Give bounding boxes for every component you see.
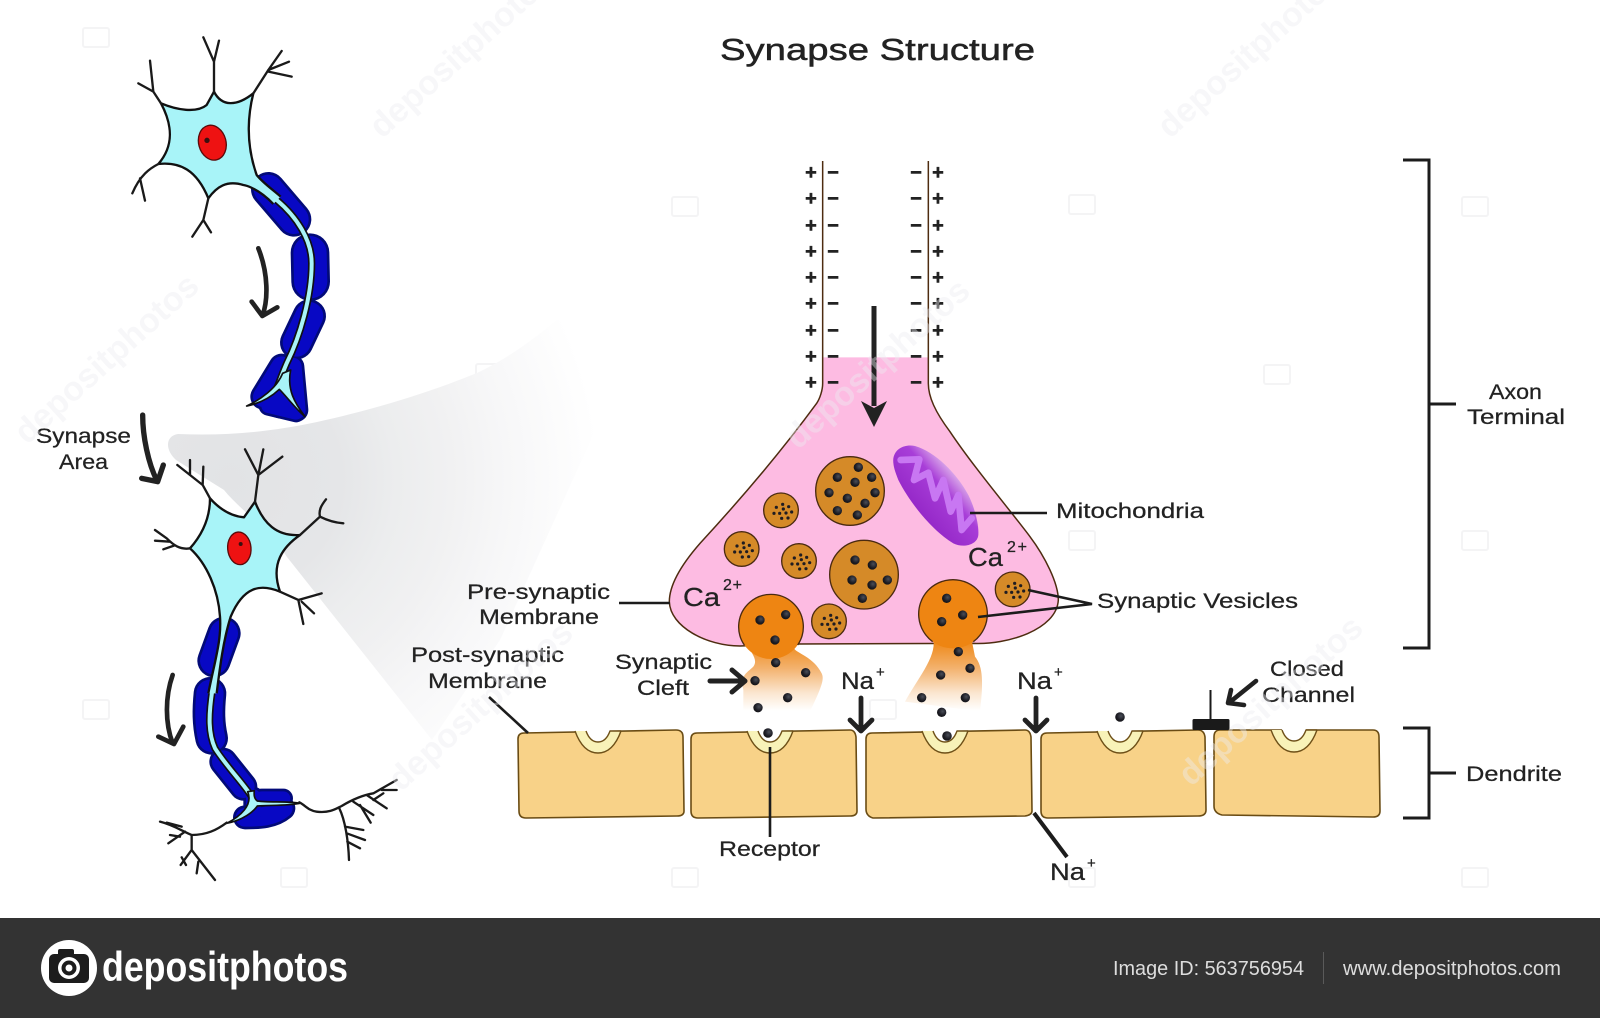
charge signs along the axon membrane: + [932,162,944,184]
label: synapse area: Synapse [36,425,131,448]
leader: pre-synaptic membrane [619,602,670,604]
charge signs along the axon membrane: − [827,372,839,394]
charge signs along the axon membrane: − [827,188,839,210]
leader: post-synaptic membrane [489,697,528,733]
arrow: impulse into terminal [861,306,887,427]
calcium ion label left: 2+ [723,577,742,594]
charge signs along the axon membrane: + [805,346,817,368]
charge signs along the axon membrane: − [827,293,839,315]
neuron 2: lower nerve cell [142,415,397,880]
arrow: sodium entering left [850,698,872,731]
label: closed channel: Channel [1262,684,1355,707]
label: sodium right: + [1054,664,1063,681]
arrow: towards synapse area [142,415,163,482]
charge signs along the axon membrane: − [910,372,922,394]
label: pre-synaptic membrane: Pre-synaptic [467,581,610,604]
leader: receptor [769,747,771,837]
label: sodium left [841,664,885,695]
calcium ion label right [968,539,1027,572]
label: post-synaptic membrane [411,644,564,693]
charge signs along the axon membrane: − [827,346,839,368]
arrow: signal direction neuron 1 [252,248,277,316]
footer logo icon [41,940,97,996]
charge signs along the axon membrane: + [805,372,817,394]
label: synaptic vesicles: Synaptic Vesicles [1097,590,1298,613]
calcium ion label right: Ca [968,542,1004,572]
bracket: dendrite [1403,728,1456,818]
watermark: depositphotos [1171,608,1370,793]
charge signs along the axon membrane: − [910,188,922,210]
label: synaptic cleft: Cleft [637,677,689,700]
footer divider [1323,952,1324,984]
label: closed channel: Closed [1270,658,1344,681]
label: receptor: Receptor [719,838,820,861]
charge signs along the axon membrane: + [932,346,944,368]
watermark [7,0,1370,798]
label: synaptic cleft: Synaptic [615,651,712,674]
calcium ion label left: Ca [683,582,721,612]
label: axon terminal: Axon [1489,381,1542,404]
charge signs along the axon membrane: + [932,372,944,394]
label: sodium right: Na [1017,668,1053,695]
label: mitochondria: Mitochondria [1056,500,1204,523]
charge signs along the axon membrane: + [805,267,817,289]
charge signs along the axon membrane: + [932,320,944,342]
closed channel [1192,690,1230,730]
footer image id: Image ID: 563756954 [1113,958,1304,980]
label: closed channel [1262,658,1355,707]
label: synapse area: Area [59,451,108,474]
arrow: signal direction neuron 2 [158,675,183,744]
synaptic vesicles [724,457,1030,639]
label: sodium left: + [876,664,885,681]
label: synapse area [36,425,131,474]
label: post-synaptic membrane: Membrane [428,670,547,693]
charge signs along the axon membrane: − [827,215,839,237]
calcium ion label right: 2+ [1007,539,1027,556]
receptors on dendrite cells [575,727,1317,753]
charge signs along the axon membrane: + [932,241,944,263]
charge signs along the axon membrane: + [805,293,817,315]
charge signs along the axon membrane: − [910,241,922,263]
watermark: depositphotos [778,271,977,456]
vesicles releasing neurotransmitter into the synaptic cleft [739,580,987,717]
footer logo wordmark: depositphotos [102,943,348,990]
footer bar [0,918,1600,1018]
neuron 1: upper nerve cell [132,0,558,417]
mitochondrion [893,446,978,546]
charge signs along the axon membrane: − [827,162,839,184]
label: sodium below: + [1087,855,1096,872]
watermark: depositphotos [7,266,206,451]
label: sodium right [1017,664,1063,695]
watermark camera icons [83,28,1488,887]
charge signs along the axon membrane: − [827,320,839,342]
charge signs along the axon membrane: − [910,346,922,368]
neuron 1 cell body, axon and dendrites [132,0,558,417]
charge signs along the axon membrane: − [910,215,922,237]
bracket: axon terminal [1403,160,1456,648]
leader: synaptic vesicles [978,590,1092,617]
charge signs along the axon membrane: + [932,293,944,315]
charge signs along the axon membrane: − [910,267,922,289]
watermark: depositphotos [381,613,580,798]
neuron 2 myelin sheath [209,633,283,817]
charge signs along the axon membrane: − [827,241,839,263]
neuron 2 cell body, axon and dendrites [155,449,397,880]
charge signs along the axon membrane: − [910,293,922,315]
zoom wedge: synapse area highlight [168,290,600,740]
dendrite cells [518,730,1380,818]
neurotransmitter dots at receptors [763,712,1125,741]
axon terminal [669,161,1058,717]
charge signs along the axon membrane: − [827,267,839,289]
charge signs along the axon membrane: − [910,162,922,184]
leader: mitochondria [970,512,1047,514]
charge signs along the axon membrane: + [932,215,944,237]
label: sodium below [1050,855,1096,886]
arrow: synaptic cleft [710,670,745,692]
label: pre-synaptic membrane [467,581,610,629]
charge signs along the axon membrane [805,162,944,394]
charge signs along the axon membrane: + [805,320,817,342]
leader: sodium exit [1034,813,1067,857]
label: sodium below: Na [1050,859,1086,886]
neuron 1 myelin sheath [263,189,311,413]
charge signs along the axon membrane: + [805,241,817,263]
charge signs along the axon membrane: + [805,215,817,237]
label: axon terminal [1467,381,1565,429]
label: sodium left: Na [841,668,875,695]
label: axon terminal: Terminal [1467,406,1565,429]
arrow: sodium entering right [1025,698,1047,731]
presynaptic membrane lines and cytoplasm [669,161,1058,646]
title: Synapse Structure [720,32,1035,67]
charge signs along the axon membrane: + [805,188,817,210]
label: synaptic cleft [615,651,712,700]
label: pre-synaptic membrane: Membrane [479,606,599,629]
charge signs along the axon membrane: − [910,320,922,342]
label: dendrite: Dendrite [1466,763,1562,786]
charge signs along the axon membrane: + [932,188,944,210]
label: post-synaptic membrane: Post-synaptic [411,644,564,667]
arrow: closed channel [1228,681,1256,705]
charge signs along the axon membrane: + [932,267,944,289]
charge signs along the axon membrane: + [805,162,817,184]
calcium ion label left [683,577,742,612]
footer url: www.depositphotos.com [1342,958,1561,980]
